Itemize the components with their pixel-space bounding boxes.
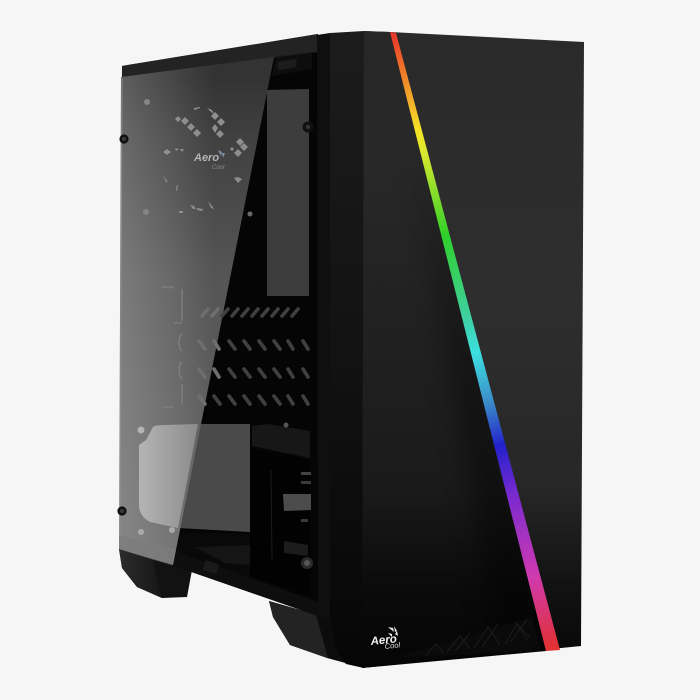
glass panel screws [117,122,314,569]
left foot [119,549,192,598]
interior: drive bay plate [267,89,309,296]
interior: drive cage [250,424,311,596]
front panel side bevel [317,31,364,668]
motherboard cable slots [214,309,308,404]
front panel logo: Cool [384,640,401,651]
fan grille pattern seen through glass [163,107,248,213]
interior: power supply right part [178,424,250,532]
side panel base [120,34,318,616]
illustration: PC tower case [117,31,584,668]
front panel left of RGB strip [362,31,546,668]
interior: floor tray [172,532,318,616]
front panel logo: Aero [369,633,397,648]
shading beside RGB strip [456,330,546,656]
front panel face [362,31,584,668]
right foot [269,601,364,668]
power supply seen through glass [139,424,198,528]
glass bottom band [119,535,176,565]
fan mount holes and dots seen through glass [138,99,288,535]
front panel logo [369,626,401,651]
interior: top vent [272,53,312,76]
fan logo seen through glass: Aero [193,152,219,164]
tempered glass reflection [119,57,274,565]
fan logo seen through glass: Cool [212,165,225,171]
top edge of side panel [122,34,318,78]
RGB light strip [390,32,560,651]
motherboard standoff outline seen through glass [162,287,182,407]
front panel triangle pattern [393,617,541,658]
cable slots seen through glass [199,309,219,404]
fan logo seen through glass [193,150,225,171]
